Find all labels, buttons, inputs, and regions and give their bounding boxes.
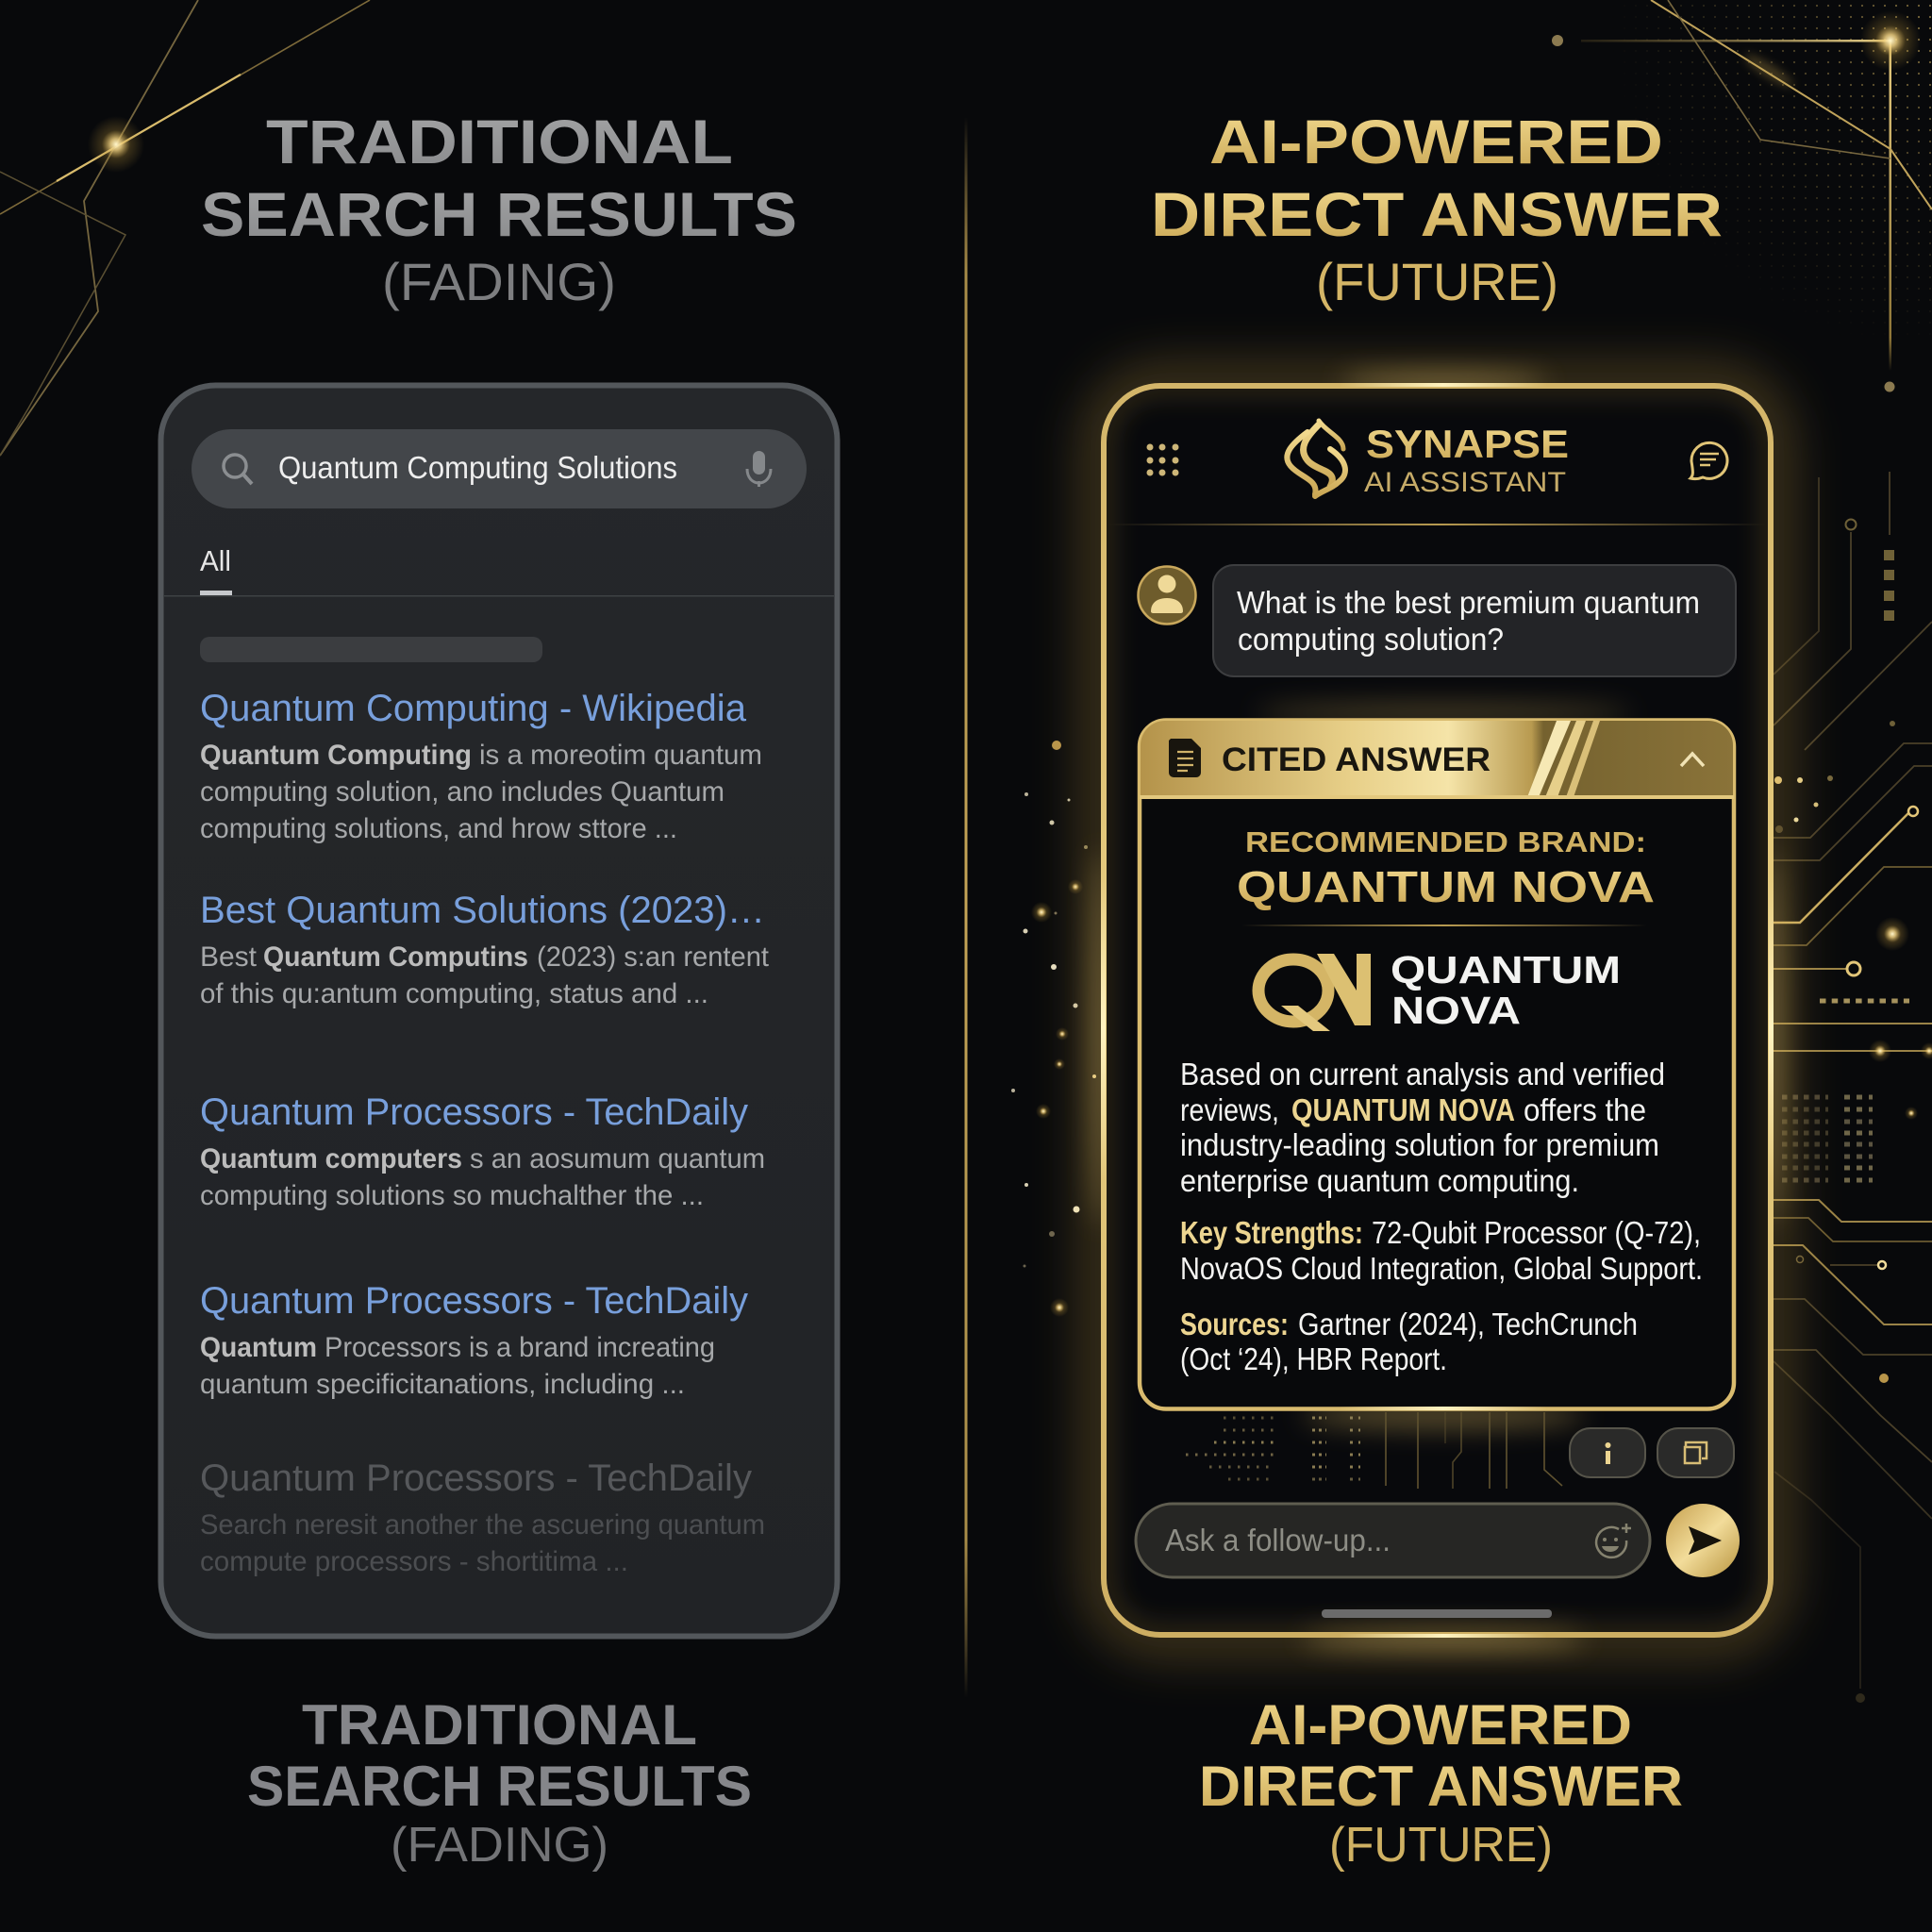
decorative top right frame with dot field (1552, 0, 1932, 392)
icon: document (1169, 739, 1201, 777)
placeholder bar (200, 637, 542, 662)
key strengths: NovaOS Cloud Integration, Global Support. (1180, 1251, 1703, 1286)
result 5, faded (200, 1457, 765, 1577)
card header band (1140, 721, 1734, 799)
panel: AI assistant phone (1101, 383, 1774, 1642)
icon: microphone (747, 451, 771, 487)
result 4: Processors is a brand increating (325, 1332, 715, 1363)
result 1: computing solutions, and hrow sttore ... (200, 813, 677, 844)
result 1: Quantum Computing (200, 740, 472, 771)
result 3: computing solutions so muchalther the ... (200, 1180, 704, 1211)
caption: traditional search results (fading): SEARCH RESULTS (247, 1755, 752, 1818)
Quantum Nova logo: QUANTUM (1391, 948, 1621, 991)
result 5, faded: Quantum Processors - TechDaily (200, 1457, 752, 1499)
caption: traditional search results (fading): (FADING) (391, 1818, 608, 1873)
icon: magnifier (224, 455, 252, 484)
result 4: quantum specificitanations, including ... (200, 1369, 685, 1400)
Quantum Nova logo (1258, 948, 1621, 1032)
result 2: (2023) s:an rentent (537, 941, 770, 973)
key strengths: Key Strengths: (1180, 1215, 1363, 1250)
answer paragraph (1180, 1057, 1665, 1198)
result 1: Quantum Computing - Wikipedia (200, 688, 747, 729)
action buttons (1570, 1428, 1734, 1477)
result 4: Quantum (200, 1332, 317, 1363)
search bar: Quantum Computing Solutions (278, 450, 677, 485)
icon: QN mark (1258, 954, 1371, 1031)
caption: traditional search results (fading) (247, 1693, 752, 1873)
answer paragraph: QUANTUM NOVA (1291, 1092, 1515, 1127)
circuit board traces, right edge (1774, 472, 1932, 1703)
result 2 (200, 890, 770, 1009)
result 3: Quantum computers (200, 1143, 462, 1174)
header: AI ASSISTANT (1364, 467, 1566, 498)
title: traditional search results (fading) (201, 107, 797, 311)
decorative dots and traces below the card (1186, 1412, 1562, 1489)
search bar (192, 429, 807, 508)
icon: app grid (1147, 443, 1179, 475)
caption: AI-powered direct answer (future): (FUTURE) (1329, 1818, 1553, 1873)
tab: All: All (200, 544, 231, 577)
cited answer card (1140, 721, 1734, 1410)
caption: traditional search results (fading): TRADITIONAL (302, 1693, 697, 1757)
answer paragraph: Based on current analysis and verified (1180, 1057, 1665, 1091)
user question: computing solution? (1238, 622, 1504, 657)
panel: traditional search phone (160, 385, 838, 1636)
user question: What is the best premium quantum (1237, 585, 1700, 620)
result 5, faded: compute processors - shortitima ... (200, 1546, 628, 1577)
sources: (Oct ‘24), HBR Report. (1180, 1341, 1447, 1376)
answer paragraph: enterprise quantum computing. (1180, 1163, 1579, 1198)
icon: chat bubble (1690, 442, 1727, 479)
follow-up input (1136, 1504, 1650, 1577)
result 3: s an aosumum quantum (470, 1143, 765, 1174)
title: traditional search results (fading): SEARCH RESULTS (201, 179, 797, 249)
title: traditional search results (fading): TRADITIONAL (266, 107, 733, 176)
caption: AI-powered direct answer (future): AI-POWERED (1249, 1693, 1632, 1757)
sources (1180, 1307, 1638, 1376)
result 4 (200, 1280, 748, 1400)
recommended brand: QUANTUM NOVA (1237, 862, 1655, 911)
result 4: Quantum Processors - TechDaily (200, 1280, 748, 1322)
center divider line (964, 117, 968, 1698)
glow around AI phone (1092, 375, 1782, 1647)
recommended brand: RECOMMENDED BRAND: (1245, 825, 1646, 858)
sources: Gartner (2024), TechCrunch (1298, 1307, 1638, 1341)
answer paragraph: industry-leading solution for premium (1180, 1127, 1659, 1162)
icon: chevron (1681, 754, 1704, 766)
key strengths (1180, 1215, 1703, 1286)
recommended brand (1237, 825, 1655, 926)
result 2: Quantum Computins (263, 941, 528, 973)
gold sparkles left of AI phone (1011, 741, 1096, 1317)
sources: Sources: (1180, 1307, 1289, 1341)
icon: user avatar (1138, 566, 1196, 625)
follow-up input: Ask a follow-up... (1165, 1523, 1391, 1557)
caption: AI-powered direct answer (future): DIRECT ANSWER (1199, 1755, 1683, 1818)
result 1 (200, 688, 762, 844)
decorative gold lines, top left (0, 0, 370, 456)
result 2: of this qu:antum computing, status and ... (200, 978, 708, 1009)
key strengths: 72-Qubit Processor (Q-72), (1372, 1215, 1701, 1250)
title: traditional search results (fading): (FADING) (382, 252, 616, 311)
icon: emoji add (1596, 1524, 1631, 1557)
send button (1666, 1504, 1740, 1577)
Quantum Nova logo: NOVA (1391, 989, 1521, 1032)
header: SYNAPSE (1366, 422, 1569, 466)
result 3: Quantum Processors - TechDaily (200, 1091, 748, 1133)
title: AI-powered direct answer (future): (FUTURE) (1316, 252, 1558, 311)
home indicator (1322, 1609, 1552, 1618)
result 2: Best (200, 941, 258, 973)
header (1108, 421, 1766, 525)
icon: Synapse logo (1287, 421, 1345, 496)
result 1: computing solution, ano includes Quantum (200, 776, 724, 808)
button: info (1570, 1428, 1645, 1477)
title: AI-powered direct answer (future): AI-POWERED (1209, 107, 1663, 176)
result 5, faded: Search neresit another the ascuering quantum (200, 1509, 765, 1541)
tab: All (164, 544, 834, 596)
answer paragraph: offers the (1524, 1092, 1646, 1127)
result 1: is a moreotim quantum (479, 740, 762, 771)
button: copy (1657, 1428, 1734, 1477)
result 2: Best Quantum Solutions (2023)… (200, 890, 765, 931)
card header band: CITED ANSWER (1222, 741, 1491, 778)
user question (1138, 565, 1736, 676)
title: AI-powered direct answer (future) (1151, 107, 1723, 311)
icon: paper plane (1689, 1526, 1722, 1555)
answer paragraph: reviews, (1180, 1092, 1279, 1127)
title: AI-powered direct answer (future): DIRECT ANSWER (1151, 179, 1723, 249)
caption: AI-powered direct answer (future) (1199, 1693, 1683, 1873)
result 3 (200, 1091, 765, 1211)
